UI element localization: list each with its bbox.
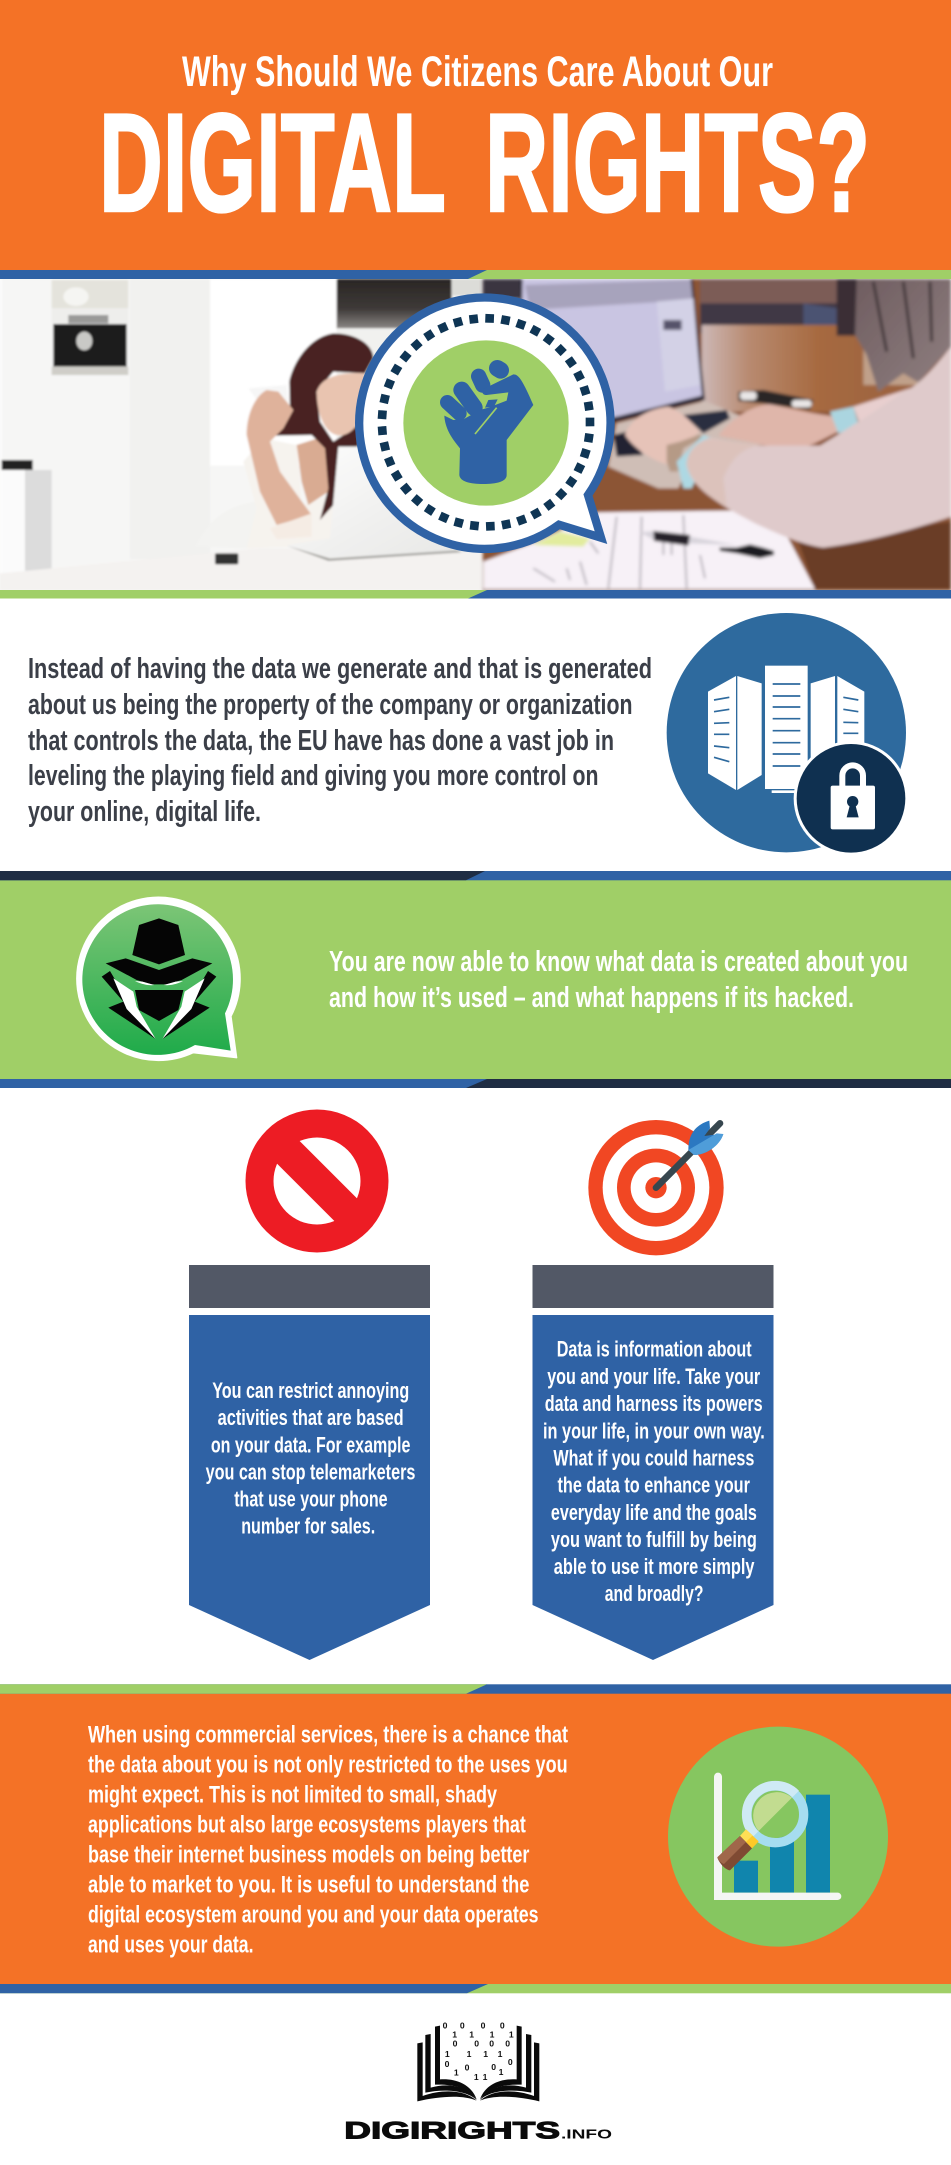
binary digits: 1: [498, 2049, 503, 2059]
binary digits: 1: [483, 2072, 488, 2082]
panel: hero photo collage: [0, 279, 951, 591]
binary digits: 0: [460, 2020, 465, 2030]
binary digits: 1: [483, 2049, 488, 2059]
band below orange: [0, 1984, 951, 1993]
text block: intro paragraph: about us being the property of the company or organization: [28, 689, 632, 721]
logo wordmark: DIGIRIGHTS: [344, 2117, 560, 2144]
binary digits: 1: [509, 2029, 514, 2039]
icon: speech bubble with fist: [359, 298, 611, 549]
text: commercial services: [88, 1722, 568, 1959]
panel: harness your data: [532, 1265, 774, 1660]
band under header: [0, 270, 951, 279]
text: everyday life and the goals: [551, 1500, 757, 1525]
binary digits: 1: [452, 2029, 457, 2039]
binary digits: [443, 2020, 514, 2082]
hands: [625, 407, 700, 465]
photo: hands typing on laptop at wooden desk: [483, 279, 951, 591]
text: [543, 1337, 765, 1606]
binary digits: 0: [489, 2038, 494, 2048]
text: you and your life. Take your: [547, 1364, 760, 1389]
text: that use your phone: [234, 1486, 388, 1511]
text: able to use it more simply: [554, 1554, 755, 1579]
panel: restrict annoying activities: [189, 1265, 430, 1660]
icon: target with dart: [588, 1120, 724, 1255]
icon: prohibition sign: [246, 1110, 388, 1252]
blue arrow box: [532, 1315, 774, 1660]
text: data and harness its powers: [545, 1391, 763, 1416]
icon: magnifier over bar chart: [668, 1727, 888, 1947]
text: activities that are based: [218, 1405, 404, 1430]
text: [206, 1378, 415, 1539]
binary digits: 1: [454, 2067, 459, 2077]
hair: [855, 279, 951, 392]
header: orange title panel: [0, 0, 951, 271]
text block: intro paragraph: Instead of having the data we generate and that is generated: [28, 653, 652, 685]
text: you want to fulfill by being: [551, 1527, 757, 1552]
dotted ring: [378, 314, 594, 531]
band under photo: [0, 590, 951, 598]
text block: intro paragraph: leveling the playing field and giving you more control on: [28, 760, 598, 792]
padlock badge: [794, 741, 908, 856]
text: commercial services: digital ecosystem around you and your data operates: [88, 1902, 538, 1929]
logo wordmark: [344, 2117, 612, 2144]
paper: [483, 510, 815, 589]
band above orange: [0, 1684, 951, 1694]
binary digits: 0: [474, 2038, 479, 2048]
binary digits: 1: [469, 2029, 474, 2039]
raised fist: [444, 368, 533, 484]
green disc: [403, 340, 569, 506]
bubble outline: [359, 298, 611, 549]
text: you can stop telemarketers: [206, 1460, 415, 1485]
text: Data is information about: [557, 1337, 752, 1362]
text: and broadly?: [605, 1581, 704, 1606]
text block: intro paragraph: that controls the data, the EU have has done a vast job in: [28, 725, 614, 757]
binary digits: 0: [443, 2020, 448, 2030]
panel: orange commercial services section: [0, 1684, 951, 1993]
text block: intro paragraph: your online, digital life.: [28, 796, 261, 828]
text: commercial services: applications but also large ecosystems players that: [88, 1812, 526, 1839]
text: commercial services: base their internet business models on being better: [88, 1842, 529, 1869]
text: commercial services: might expect. This is not limited to small, shady: [88, 1782, 497, 1809]
binary digits: 0: [481, 2020, 486, 2030]
text: commercial services: the data about you is not only restricted to the uses you: [88, 1752, 568, 1779]
binary digits: 0: [491, 2062, 496, 2072]
text: in your life, in your own way.: [543, 1418, 765, 1443]
laptop screen: [520, 279, 705, 428]
text: on your data. For example: [211, 1432, 410, 1457]
binary digits: 1: [467, 2049, 472, 2059]
binary digits: 1: [474, 2072, 479, 2082]
binary digits: 0: [465, 2063, 470, 2073]
text: commercial services: able to market to you. It is useful to understand the: [88, 1872, 529, 1899]
text: the data to enhance your: [558, 1473, 750, 1498]
icon: spy in green speech bubble: [77, 897, 240, 1060]
binary digits: 1: [490, 2029, 495, 2039]
text: What if you could harness: [553, 1445, 754, 1470]
binary digits: 1: [445, 2049, 450, 2059]
band above green: [0, 871, 951, 880]
main title: DIGITAL: [99, 84, 446, 241]
logo: open book with binary digits: [417, 2020, 539, 2101]
panel: green section: [0, 871, 951, 1088]
blue arrow box: [189, 1315, 430, 1660]
binary digits: 0: [453, 2038, 458, 2048]
text: commercial services: When using commercial services, there is a chance that: [88, 1722, 568, 1749]
binary digits: 0: [445, 2059, 450, 2069]
laptop: [331, 444, 462, 553]
lower-right wood: [798, 522, 951, 589]
binary digits: 0: [508, 2057, 513, 2067]
woman: [244, 440, 298, 467]
text: number for sales.: [241, 1514, 375, 1539]
icon: servers with padlock: [667, 613, 908, 856]
empty grey heading bar: [189, 1265, 430, 1308]
photo: woman with laptop in white kitchen: [0, 279, 482, 591]
sweater: [687, 347, 951, 548]
binary digits: 0: [500, 2020, 505, 2030]
text: You can restrict annoying: [212, 1378, 409, 1403]
band below green: [0, 1079, 951, 1088]
text block: intro paragraph: [28, 653, 652, 828]
text: now able to know: [329, 946, 908, 1014]
logo wordmark: .INFO: [561, 2127, 612, 2141]
text: commercial services: and uses your data.: [88, 1932, 254, 1959]
book pages: [417, 2026, 539, 2101]
binary digits: 0: [505, 2038, 510, 2048]
binary digits: 1: [499, 2067, 504, 2077]
empty grey heading bar: [532, 1265, 774, 1308]
